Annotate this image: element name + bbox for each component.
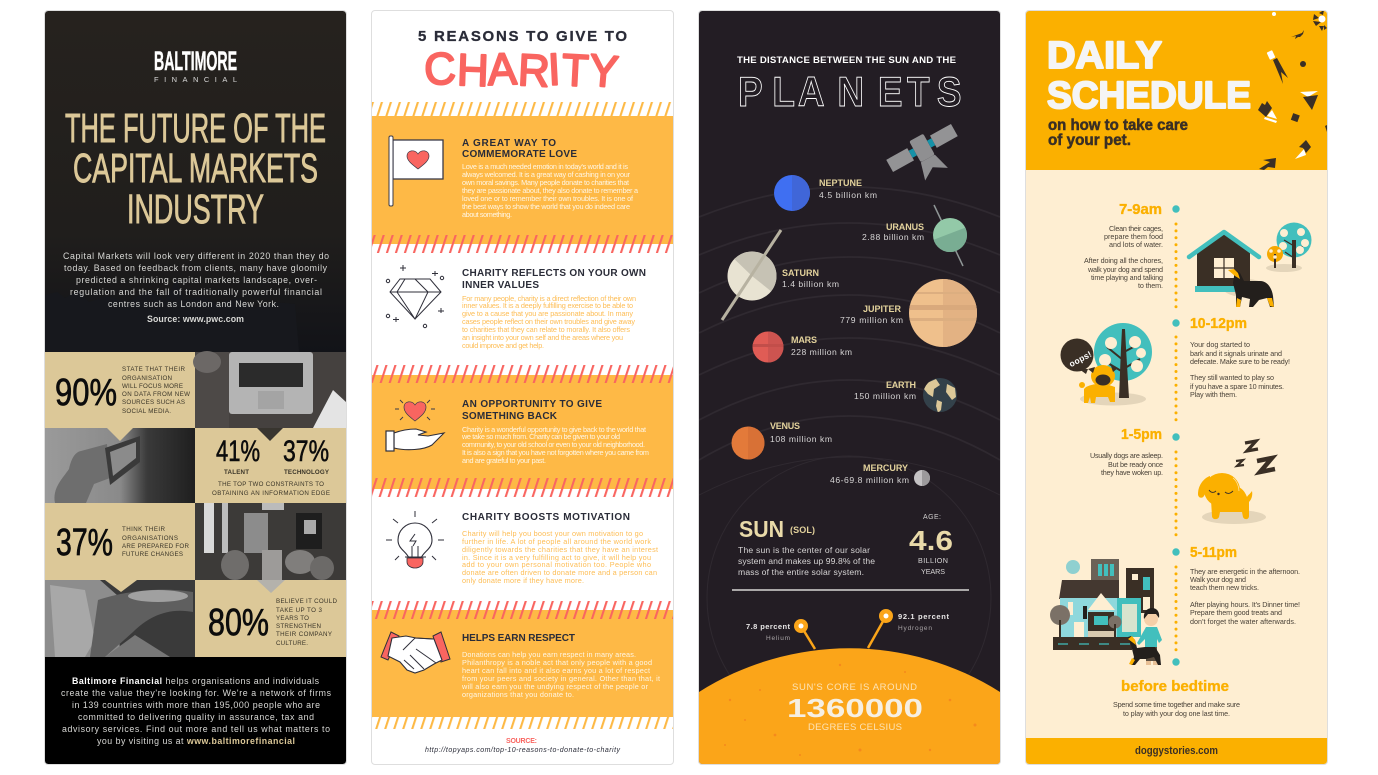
callout: hydrogen: Hydrogen [898,625,932,632]
stat tile: 80%: YEARS TO [276,615,309,622]
sun description: SUN [739,516,784,542]
planet: saturn: SATURN [782,268,819,278]
title: SCHEDULE [1047,75,1251,117]
planet: mars: 228 million km [791,347,852,357]
stat tile: 90%: ON DATA FROM NEW [122,391,190,398]
icon: light bulb [386,511,444,568]
section: respect: from your peers and society in general. Other than that, it [462,674,660,683]
planet: venus: VENUS [770,421,800,431]
illustration: dog house [1189,222,1312,307]
section: inner values: cases people reflect on their own troubles and give away [462,317,635,326]
planet: neptune: 4.5 billion km [819,190,877,200]
timeline [1172,205,1180,666]
planet: jupiter [840,279,977,347]
sun description: The sun is the center of our solar [738,545,870,555]
schedule: 7-9am: time playing and talking [1091,273,1163,282]
section: something back: we take so much from. Charity can be given to your old [461,432,620,441]
sun description [738,516,875,577]
sun core text [787,682,923,733]
footer text: advisory services. Find out more and tell us what matters to [62,724,330,734]
section: something back: AN OPPORTUNITY TO GIVE [462,399,602,410]
schedule: 1-5pm: But be ready once [1108,460,1163,469]
sun age [909,514,953,576]
footer: doggystories.com [1135,745,1218,757]
title: CHARITY [423,42,620,98]
source [425,738,620,754]
footer text: you by visiting us at www.baltimorefinancial [97,736,295,746]
schedule: 1-5pm: they have woken up. [1101,468,1163,477]
footer text: in 139 countries with more than 195,000 people who are [72,700,320,710]
schedule: 10-12pm: 10-12pm [1190,315,1247,332]
schedule: 10-12pm: bark and it signals urinate and [1190,349,1282,358]
planet: mercury [830,463,930,486]
section: commemorate love: the best ways to show the world that you do indeed care [462,202,630,211]
section: respect: HELPS EARN RESPECT [462,633,575,644]
section: commemorate love: about something. [462,210,512,219]
stat tile: 41% and 37%: 41% [216,435,260,468]
intro text [63,251,329,324]
stat tile: 37%: 37% [56,522,113,564]
schedule: 10-12pm: Your dog started to [1190,340,1250,349]
band backgrounds [372,102,673,729]
callout: hydrogen [868,609,950,648]
section: commemorate love: always welcomed. It is a great way of cashing in on your [462,170,631,179]
schedule: 7-9am: to them. [1138,281,1163,290]
stat tile: 37%: ARE PREPARED FOR [122,543,190,550]
illustration: sleeping dog [1198,441,1275,524]
brand logo: FINANCIAL [154,75,237,84]
footer text: Baltimore Financial helps organisations and individuals [72,676,320,686]
stat tile: 80%: CULTURE. [276,640,308,647]
section: motivation: add to your own personal motivation too. People who [462,560,651,569]
sun core text: 1360000 [787,693,923,723]
source: http://topyaps.com/top-10-reasons-to-donate-to-charity [425,747,620,754]
stat tile: 80%: TAKE UP TO 3 [276,607,323,614]
icon: heart in hand [386,400,444,451]
section: commemorate love: A GREAT WAY TO [462,138,556,149]
schedule: 5-11pm: After playing hours. It's Dinner time! [1190,600,1300,609]
title: of your pet. [1048,132,1131,149]
confetti decoration [1258,10,1327,170]
section: inner values: could improve and get help. [462,341,544,350]
schedule: 1-5pm: Usually dogs are asleep. [1090,451,1163,460]
section: motivation: diligently towards the charities that they have an interest [462,545,658,554]
stat tile: 37%: FUTURE CHANGES [122,551,183,558]
callout: helium: 7.8 percent [746,622,790,631]
planet: uranus [862,205,975,266]
section: respect: Philanthropy is a noble act that only people with a good [462,658,652,667]
section: inner values: CHARITY REFLECTS ON YOUR OWN [462,268,646,279]
section: motivation: Charity will help you boost your own motivation to go [462,529,643,538]
section: something back [461,399,649,465]
planet: mars [752,331,852,363]
title: THE FUTURE OF THE [65,105,326,151]
title: PLANETS [738,69,962,116]
planet: earth [854,378,957,413]
footer text: create the value they're looking for. We're a network of firms [61,688,332,698]
schedule: 7-9am: Clean their cages, [1109,224,1163,233]
photo: restaurant [195,503,346,580]
title: 5 REASONS TO GIVE TO [418,28,627,45]
section: motivation: donate are often driven to donate more and a person can [462,568,657,577]
section: motivation: only donate more if they have more. [462,576,584,585]
source: SOURCE: [506,738,537,745]
schedule: before bedtime: before bedtime [1121,678,1229,695]
sun core text: DEGREES CELSIUS [808,722,902,733]
stat tile: 90%: WILL FOCUS MORE [122,383,183,390]
section: something back: and are grateful to your past. [462,456,546,465]
stat tile: 37%: ORGANISATIONS [122,535,178,542]
section: respect: will also earn you the undying respect of the people or [461,682,649,691]
sun description: mass of the entire solar system. [738,567,864,577]
planet: mercury: 46-69.8 million km [830,475,909,485]
schedule: 10-12pm: They still wanted to play so [1190,373,1274,382]
schedule: 7-9am [1084,201,1163,290]
section: respect: organizations that you donate to. [462,690,574,699]
callout: hydrogen: 92.1 percent [898,612,950,621]
intro text: predicted a shrinking capital markets landscape, over- [76,275,317,285]
panel: daily schedule [1026,10,1327,764]
sun description: (SOL) [790,525,815,535]
sun age: BILLION [918,556,948,565]
stat tile: 80%: 80% [208,602,269,644]
section: respect [461,633,660,699]
planet: saturn: 1.4 billion km [782,279,839,289]
photo: hand with phone [45,428,195,503]
stat tile: 41% and 37%: 37% [283,435,329,468]
section: respect: Donations can help you earn respect in many areas. [462,650,636,659]
photo: laptop [193,351,346,428]
stat tile: 41% and 37% [195,428,346,503]
section: commemorate love: own moral savings. Many people donate to charities that [462,178,629,187]
sun disc [699,648,1000,764]
sun age: 4.6 [909,525,953,556]
planet: uranus: URANUS [886,222,924,232]
callout: helium: Helium [766,635,790,642]
section: motivation: further in life. A lot of people all around the world work [462,537,651,546]
icon: handshake [381,632,450,673]
section: motivation: in. Since it is a very fulfilling act to give, it will help you [462,553,651,562]
planet: saturn [722,230,839,320]
section: commemorate love: loved one or to remember their own troubles. It is one of [462,194,634,203]
planet: neptune: NEPTUNE [819,178,862,188]
schedule: before bedtime: to play with your dog one last time. [1123,709,1230,718]
illustration: city walk [1050,559,1162,665]
stat tile: 37% [45,503,195,580]
sun age: YEARS [921,567,945,576]
planet: earth: EARTH [886,380,916,390]
intro text: today. Based on feedback from clients, many have gloomily [64,263,328,273]
schedule: 10-12pm: defecate. Make sure to be ready! [1190,357,1290,366]
planet: neptune [774,175,877,211]
schedule: 10-12pm [1190,315,1290,399]
section: motivation: CHARITY BOOSTS MOTIVATION [462,512,630,523]
stat tile: 41% and 37%: OBTAINING AN INFORMATION EDGE [212,490,330,497]
brand logo [154,51,237,82]
intro text: Source: www.pwc.com [147,314,244,324]
title [418,30,627,88]
stat tile: 90% [45,352,195,428]
section: something back: SOMETHING BACK [462,411,558,422]
schedule: before bedtime: Spend some time together and make sure [1113,700,1240,709]
footer text: committed to delivering quality in assurance, tax and [78,712,314,722]
planet: mercury: MERCURY [863,463,908,473]
skyline photo [45,278,299,352]
icon: flag with heart [389,136,443,206]
schedule: 7-9am: 7-9am [1119,201,1162,218]
section: inner values: inner values. It is a deeply fulfilling exercise to be able to [462,301,633,310]
stat tile: 41% and 37%: TALENT [224,469,249,476]
icon: diamond [386,265,444,328]
intro text: regulation and the fall of traditionally powerful financial [70,287,322,297]
sun age: AGE: [923,514,941,521]
stat tile: 90%: SOCIAL MEDIA. [122,408,171,415]
intro text: Capital Markets will look very different in 2020 than they do [63,251,329,261]
section: commemorate love: they are passionate about, they also donate to remember a [462,186,639,195]
section: something back: community, to your old school or even to your old neighborhood. [462,440,645,449]
schedule: before bedtime [1113,678,1240,718]
planet: mars: MARS [791,335,817,345]
schedule: 1-5pm: 1-5pm [1121,426,1162,443]
stat tile: 80%: THEIR COMPANY [276,631,332,638]
section: inner values: INNER VALUES [462,280,539,291]
panel: charity [372,11,673,764]
sun core text: SUN'S CORE IS AROUND [792,682,917,693]
schedule: 7-9am: After doing all the chores, [1084,256,1163,265]
stat tile: 37%: THINK THEIR [122,526,166,533]
planet: uranus: 2.88 billion km [862,232,924,242]
section: commemorate love: COMMEMORATE LOVE [462,149,577,160]
title [1047,35,1251,149]
section: something back: It is also a sign that you have not forgotten where you came from [462,448,649,457]
schedule: 5-11pm: teach them new tricks. [1190,583,1259,592]
icon: satellite [886,124,958,180]
schedule: 5-11pm: They are energetic in the afternoon. [1190,567,1300,576]
planet: earth: 150 million km [854,391,916,401]
stat tile: 41% and 37%: THE TOP TWO CONSTRAINTS TO [218,481,324,488]
footer text [45,657,346,764]
section: inner values: give to a cause that you are passionate about. In many [462,309,633,318]
schedule: 7-9am: prepare them food [1104,232,1163,241]
title: THE DISTANCE BETWEEN THE SUN AND THE [737,55,957,66]
schedule: 1-5pm [1090,426,1163,477]
section: inner values [462,268,646,350]
section: motivation [462,512,658,585]
panel: planets [699,11,1000,764]
photo: person with phone [45,580,195,657]
illustration: pug and tree: oops! [1067,349,1093,369]
stat tile: 80%: STRENGTHEN [276,623,321,630]
planet: venus: 108 million km [770,434,832,444]
brand logo: BALTIMORE [154,46,237,76]
schedule: 5-11pm [1190,544,1300,626]
title: DAILY [1047,35,1162,77]
stat tile: 80%: BELIEVE IT COULD [276,598,338,605]
section: inner values: For many people, charity is a direct reflection of their own [462,294,636,303]
stat tile: 90%: ORGANISATION [122,375,172,382]
schedule: 7-9am: walk your dog and spend [1087,265,1163,274]
stat tile: 90%: SOURCES SUCH AS [122,399,185,406]
sun description: system and makes up 99.8% of the [738,556,875,566]
stat tile: 41% and 37%: TECHNOLOGY [284,469,330,476]
title: CAPITAL MARKETS [73,145,318,191]
stat tile: 90%: 90% [55,372,117,414]
schedule: 10-12pm: Play with them. [1190,390,1237,399]
schedule: 5-11pm: 5-11pm [1190,544,1237,561]
planet: jupiter: 779 million km [840,315,903,325]
section: respect: heart can fall into and it also earns you a lot of respect [462,666,650,675]
stat tile: 80% [195,580,346,657]
title [737,56,960,107]
intro text: centres such as London and New York. [108,299,279,309]
section: inner values: an insight into your own self and the areas where you [462,333,623,342]
schedule: 5-11pm: Prepare them good treats and [1190,608,1282,617]
planet: jupiter: JUPITER [863,304,902,314]
schedule: 7-9am: and lots of water. [1109,240,1163,249]
section: commemorate love: Love is a much needed emotion in today's world and it is [462,162,628,171]
title: INDUSTRY [127,186,264,232]
title: on how to take care [1048,117,1188,134]
illustration: pug and tree [1060,323,1152,406]
callout: helium [746,619,815,649]
section: inner values: to charities that they can relate to morally. It also offers [462,325,630,334]
schedule: 10-12pm: if you have a spare 10 minutes. [1190,382,1284,391]
schedule: 5-11pm: Walk your dog and [1190,575,1246,584]
section: something back: Charity is a wonderful opportunity to give back to the world that [462,425,646,434]
schedule: 5-11pm: don't forget the water afterwards. [1190,617,1296,626]
panel: capital markets [45,11,346,764]
planet: venus [732,421,832,460]
stat tile: 90%: STATE THAT THEIR [122,366,186,373]
title [65,113,326,224]
orbit lines [699,186,1000,675]
section: commemorate love [462,138,639,219]
